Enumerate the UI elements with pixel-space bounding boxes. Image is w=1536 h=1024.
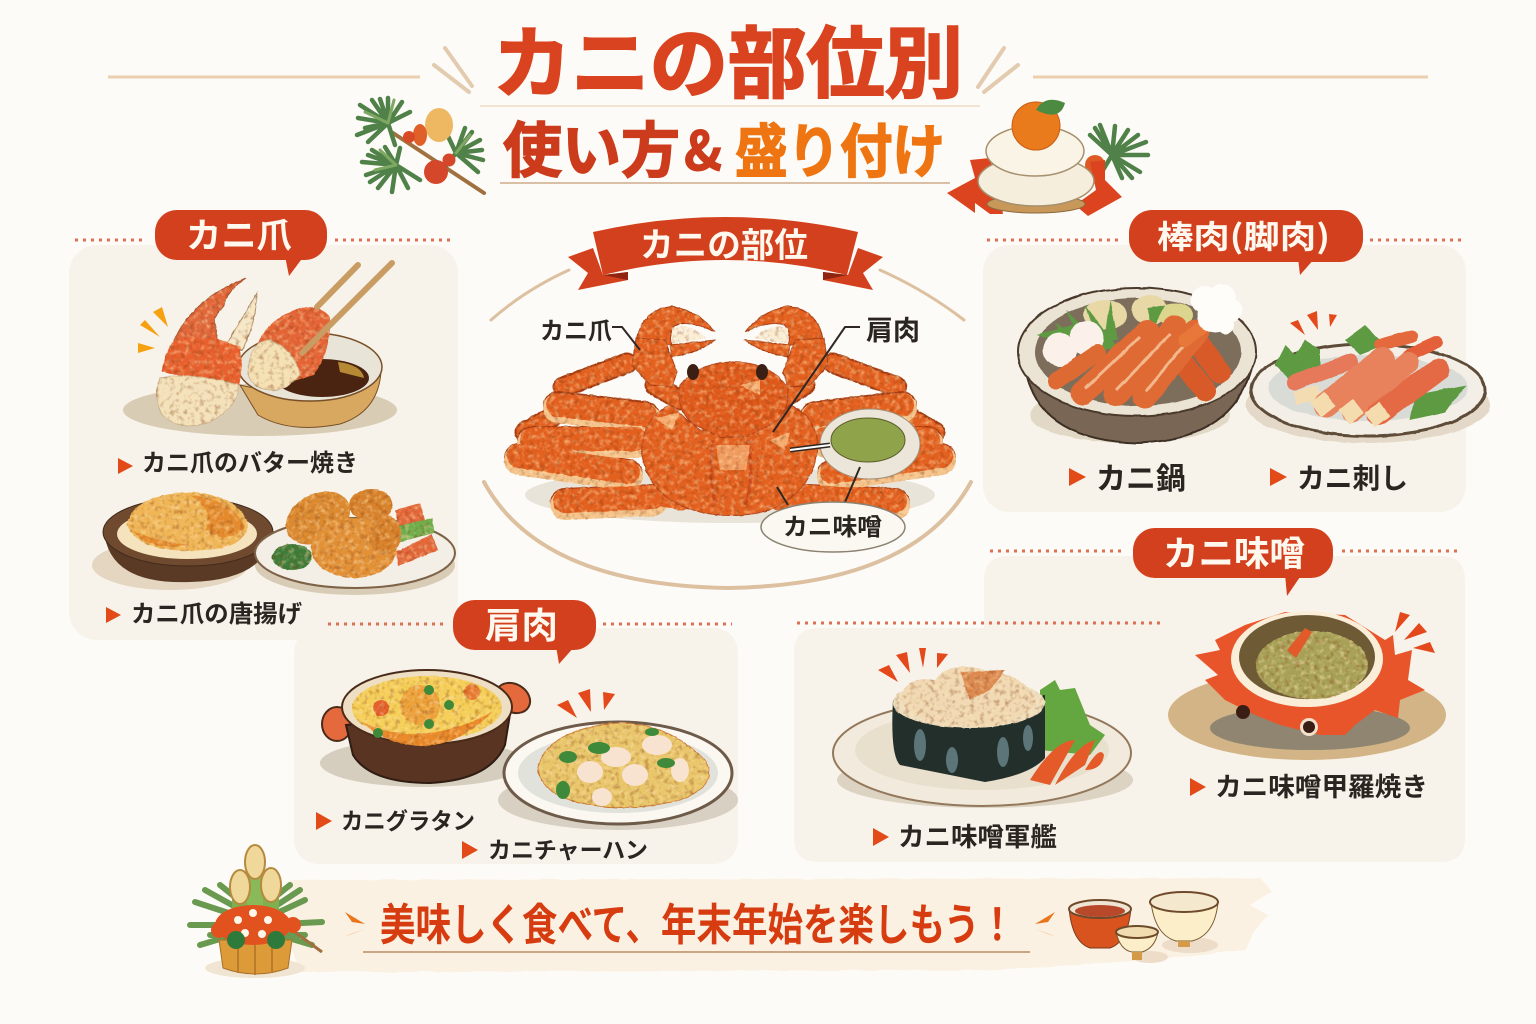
icon: pine sprig with berries xyxy=(357,98,484,193)
steam xyxy=(1191,284,1242,334)
label: カニ味噌: カニ味噌 xyxy=(783,507,882,542)
subtitle: 使い方 xyxy=(503,103,680,190)
subtitle: 盛り付け xyxy=(735,105,945,189)
heading bubble: カニ爪 xyxy=(155,208,327,276)
illustration: crab fried rice xyxy=(498,722,738,830)
heading ribbon: カニの部位 xyxy=(640,218,808,267)
panel: 肩肉 xyxy=(294,597,738,865)
subtitle: & xyxy=(684,107,722,186)
closing message: 美味しく食べて、年末年始を楽しもう！ xyxy=(380,889,1015,953)
icon: kadomatsu xyxy=(190,845,322,978)
illustration: claw gratin and fried claw xyxy=(92,481,455,595)
icon: kagami mochi xyxy=(947,100,1148,216)
label: カニグラタン xyxy=(341,802,475,836)
label: カニ味噌甲羅焼き xyxy=(1215,767,1428,804)
decorative chevrons xyxy=(343,912,1057,937)
label: カニ爪の唐揚げ xyxy=(131,594,302,629)
label: カニチャーハン xyxy=(488,831,648,865)
label: 肩肉: 肩肉 xyxy=(866,309,920,348)
subtitle xyxy=(503,103,945,190)
header title block xyxy=(108,2,1428,190)
title: カニの部位別 xyxy=(493,2,963,114)
footer banner xyxy=(285,878,1272,972)
illustration: butter-grilled claw xyxy=(123,278,397,436)
label: カニ味噌 xyxy=(761,502,905,552)
heading bubble: 棒肉(脚肉) xyxy=(1129,210,1363,275)
illustration: miso grilled in shell xyxy=(1168,611,1446,760)
illustration: crab hot pot xyxy=(1018,284,1256,443)
panel: 棒肉 xyxy=(983,210,1490,512)
icon: sake cups xyxy=(1069,892,1218,963)
icon: accent rays xyxy=(138,307,168,353)
icon: chopsticks xyxy=(302,263,392,353)
label: カニ爪: カニ爪 xyxy=(540,311,612,346)
heading bubble: カニ味噌: カニ味噌 xyxy=(1163,526,1305,577)
heading bubble: 肩肉: 肩肉 xyxy=(485,597,558,649)
label: カニ刺し xyxy=(1297,457,1408,497)
heading bubble: カニ爪: カニ爪 xyxy=(186,208,292,259)
panel: カニ味噌 xyxy=(794,526,1465,862)
crab part labels xyxy=(540,309,920,552)
panel: カニ爪 xyxy=(69,208,458,640)
illustration: crab sashimi plate xyxy=(1246,325,1490,443)
panel: カニの部位 xyxy=(484,217,971,588)
label: カニ鍋 xyxy=(1096,454,1186,498)
icon: accent rays xyxy=(1395,612,1435,653)
oval frame xyxy=(484,270,971,588)
heading bubble: 棒肉(脚肉): 棒肉(脚肉) xyxy=(1157,212,1330,258)
heading bubble: カニ味噌 xyxy=(1133,526,1333,596)
illustration: crab gratin xyxy=(320,670,536,787)
label: カニ爪のバター焼き xyxy=(142,443,358,478)
illustration: crab xyxy=(519,306,941,523)
label: カニ味噌軍艦 xyxy=(898,817,1057,854)
illustration: miso gunkan sushi xyxy=(833,667,1133,808)
heading ribbon xyxy=(568,217,883,290)
icon: accent rays xyxy=(1290,311,1337,335)
icon: accent rays xyxy=(878,648,948,682)
heading bubble: 肩肉 xyxy=(453,597,596,664)
icon: accent rays xyxy=(557,689,615,718)
